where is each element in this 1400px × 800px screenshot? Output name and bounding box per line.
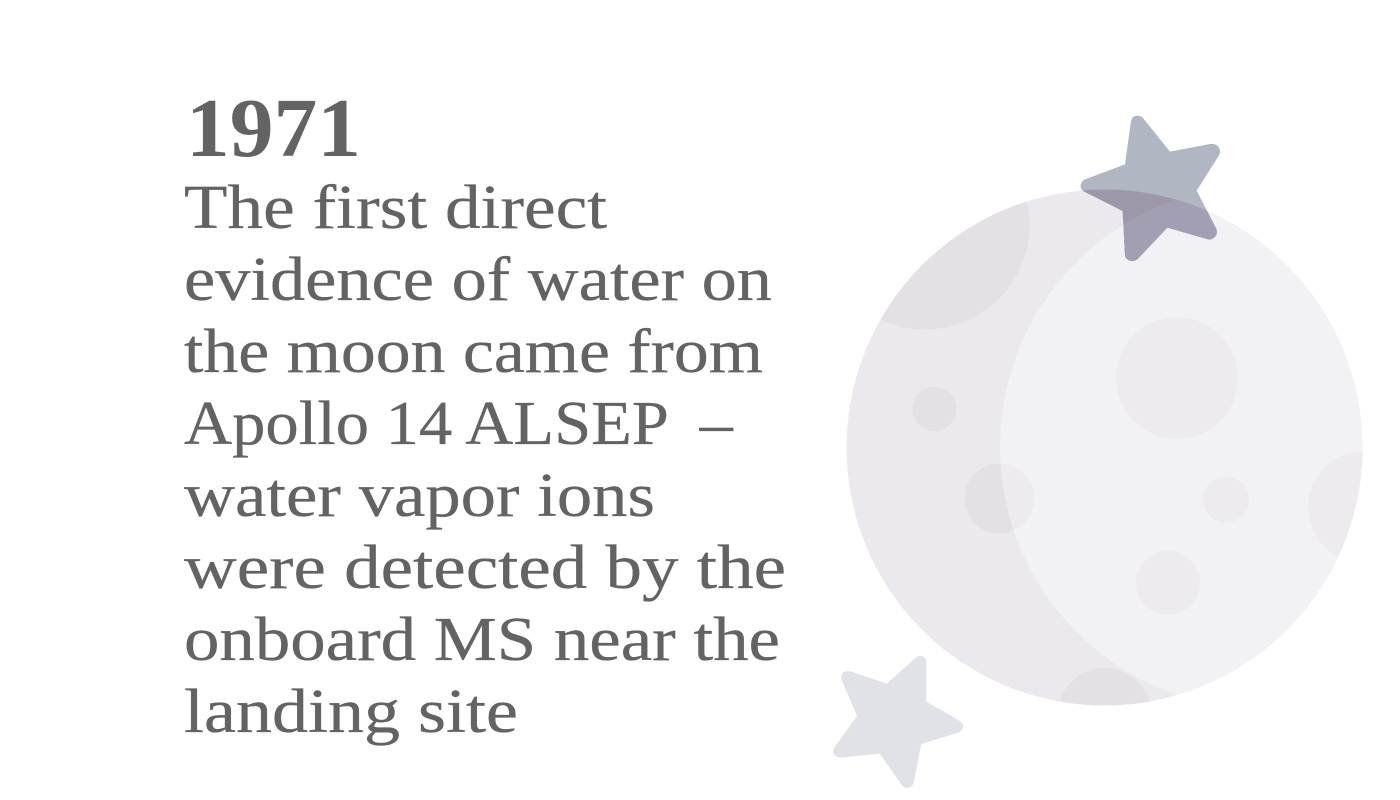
- text block: description: evidence of water on: [184, 246, 772, 314]
- text block: description: landing site: [184, 678, 518, 746]
- text block: description: the moon came from: [184, 318, 763, 386]
- text block: description: onboard MS near the: [184, 606, 780, 674]
- text block: description: water vapor ions: [184, 462, 655, 530]
- year heading: 1971: [186, 82, 361, 175]
- text block: description: The first direct: [184, 174, 607, 242]
- moon lit side: [1000, 317, 1362, 615]
- icon: moon: [846, 190, 1362, 706]
- text block: description: were detected by the: [184, 534, 786, 602]
- text block: description: [184, 174, 786, 746]
- icon: upper star: [1081, 116, 1220, 261]
- star overlap with moon: [1082, 190, 1217, 261]
- text block: description: Apollo 14 ALSEP –: [184, 390, 734, 458]
- moon craters: [880, 202, 1362, 706]
- icon: lower star: [833, 656, 963, 788]
